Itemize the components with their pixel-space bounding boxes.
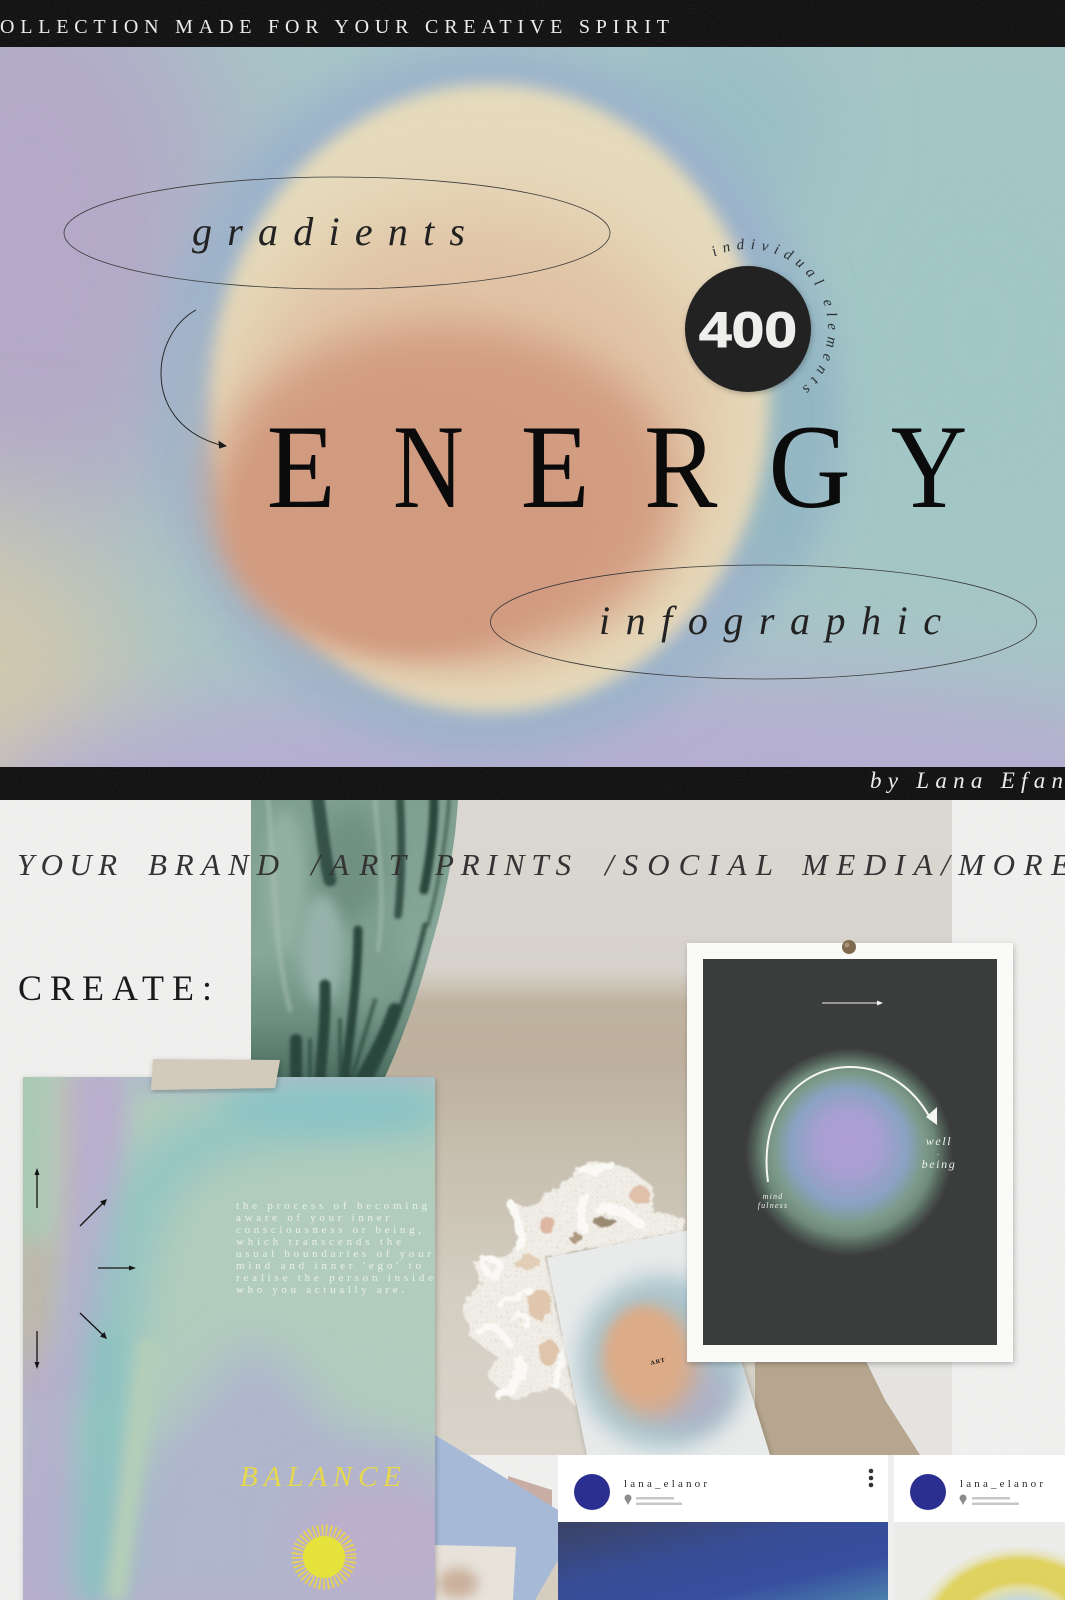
oval label: gradients: gradients: [192, 209, 465, 254]
image: blue papers: [435, 1435, 558, 1600]
image: ART gradient card: [547, 1228, 770, 1455]
title: ENERGY: [267, 400, 967, 534]
label: mindfulness: mind: [763, 1192, 783, 1201]
username: lana_elanor: [960, 1478, 1043, 1490]
byline: by Lana Efan: [870, 768, 1063, 793]
location lines: [636, 1497, 682, 1505]
image: white coral: [463, 1160, 683, 1408]
arrow: white circular arc: [767, 1067, 937, 1182]
heading: YOUR BRAND / ART PRINTS / SOCIAL MEDIA / MORE: MEDIA/MORE: [801, 847, 1065, 882]
label: well being: .: [937, 1148, 941, 1157]
title: ENERGY: E: [267, 401, 336, 534]
panel: social post 2: [894, 1455, 1065, 1600]
poster gradient artwork: [23, 1077, 435, 1600]
label: ART: ART: [650, 1358, 667, 1367]
top black band: [0, 0, 1065, 47]
label: well being: being: [922, 1157, 956, 1171]
location lines: [972, 1497, 1019, 1505]
title: ENERGY: N: [393, 400, 464, 533]
text block: poster paragraph: usual boundaries of your: [236, 1248, 431, 1260]
label: mindfulness: [758, 1192, 788, 1210]
heading: YOUR BRAND / ART PRINTS / SOCIAL MEDIA / MORE: /SOCIAL: [603, 847, 773, 882]
panel: still-life photo background: [385, 800, 952, 1455]
text block: poster paragraph: [236, 1200, 433, 1296]
oval label: infographic: infographic: [599, 598, 941, 643]
badge: 400 individual elements: individual elements: [712, 238, 838, 393]
image: small gradient paper: [435, 1545, 517, 1600]
text block: poster paragraph: the process of becoming: [236, 1200, 428, 1212]
heading: CREATE: CREATE:: [18, 968, 212, 1008]
gradient artwork: [894, 1522, 1065, 1600]
image: masking tape: [151, 1059, 280, 1090]
arrows on poster: [34, 1168, 136, 1369]
avatar: [910, 1474, 946, 1510]
arrow: curved pointer to title: [161, 310, 226, 448]
heading: YOUR BRAND / ART PRINTS / SOCIAL MEDIA / MORE: /ART: [309, 847, 409, 882]
username: lana_elanor: [624, 1478, 707, 1490]
text block: poster paragraph: mind and inner 'ego' to: [236, 1260, 422, 1272]
label: mindfulness: fulness: [758, 1201, 788, 1210]
avatar: [574, 1474, 610, 1510]
image: green glass vase: [251, 800, 461, 1080]
heading: YOUR BRAND / ART PRINTS / SOCIAL MEDIA / MORE: PRINTS: [434, 847, 571, 882]
heading: YOUR BRAND / ART PRINTS / SOCIAL MEDIA / MORE: BRAND: [148, 847, 279, 882]
panel: framed dark poster: [687, 943, 1013, 1362]
title: ENERGY: E: [521, 401, 590, 534]
icon: menu dots: [869, 1469, 873, 1487]
gradient orb: [745, 1048, 953, 1256]
badge: 400 individual elements: 400: [699, 302, 797, 358]
label: BALANCE: BALANCE: [240, 1461, 401, 1493]
text block: poster paragraph: consciousness or being,: [236, 1224, 421, 1236]
icon: location pin: [960, 1494, 966, 1505]
tagline: OLLECTION MADE FOR YOUR CREATIVE SPIRIT: [0, 16, 669, 38]
title: ENERGY: G: [768, 401, 851, 534]
panel: gradient BALANCE poster: [23, 1077, 435, 1600]
title: ENERGY: Y: [891, 401, 967, 533]
text block: poster paragraph: realise the person inside: [236, 1272, 433, 1284]
text block: poster paragraph: which transcends the: [236, 1236, 401, 1248]
bottom black band: [0, 767, 1065, 800]
heading: YOUR BRAND / ART PRINTS / SOCIAL MEDIA / MORE: YOUR: [17, 847, 117, 882]
text block: poster paragraph: aware of your inner: [236, 1212, 389, 1224]
heading: YOUR BRAND / ART PRINTS / SOCIAL MEDIA / MORE: [17, 847, 1065, 882]
oval label: gradients: [64, 177, 610, 289]
oval label: infographic: [490, 565, 1036, 679]
label: well being: [922, 1134, 956, 1171]
text block: poster paragraph: who you actually are.: [236, 1284, 404, 1296]
label: well being: well: [926, 1134, 952, 1148]
icon: location pin: [624, 1494, 632, 1505]
icon: yellow sun: [298, 1531, 350, 1583]
arrow: small white: [822, 1000, 883, 1006]
panel: social post 1: [558, 1455, 888, 1600]
icon: pin: [842, 940, 856, 954]
panel: gradient hero: [0, 47, 1065, 767]
title: ENERGY: R: [644, 400, 718, 533]
